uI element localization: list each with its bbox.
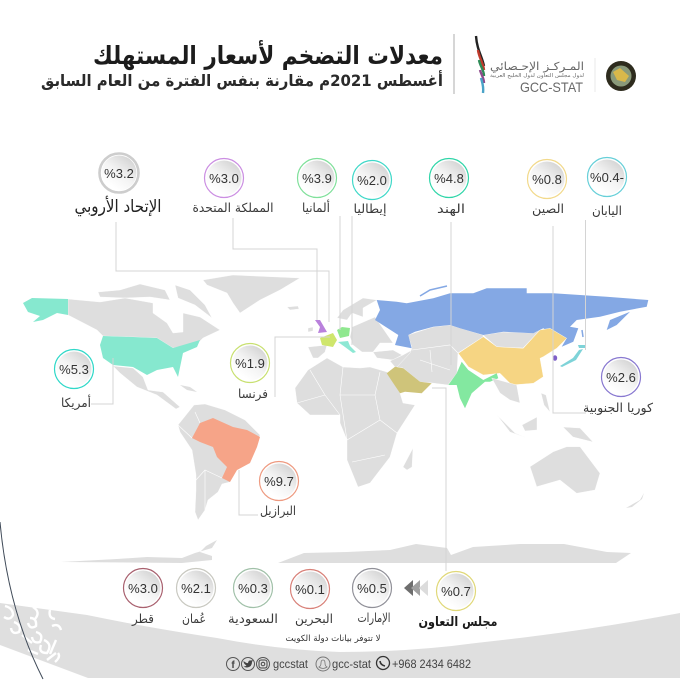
South Korea: [553, 355, 557, 361]
France: [320, 333, 337, 347]
footer contacts: [226, 656, 471, 671]
marker: Saudi Arabia: السعودية: [228, 611, 278, 627]
decorative calligraphy pattern: [4, 606, 61, 662]
marker: UAE: %0.5: [357, 581, 387, 596]
marker: USA: [54, 350, 94, 411]
South America: [178, 404, 260, 520]
Europe: [308, 298, 402, 360]
marker: Bahrain: %0.1: [295, 582, 325, 597]
New Zealand: [626, 493, 644, 508]
Southeast Asia: [492, 378, 593, 442]
marker: UAE: [352, 568, 392, 626]
marker: France: %1.9: [235, 356, 265, 371]
Antarctica: [61, 540, 631, 563]
logo: GCC-STAT: [476, 36, 585, 95]
marker: China: الصين: [532, 201, 564, 217]
Canada: [68, 298, 220, 348]
Central Asia and Middle East: [397, 325, 483, 385]
logo divider: [594, 58, 596, 92]
marker: EU: %3.2: [104, 166, 134, 181]
icon: GCC emblem: [606, 61, 636, 91]
subtitle: أغسطس 2021م مقارنة بنفس الفترة من العام السابق: [41, 70, 443, 90]
marker: Brazil: [260, 462, 298, 519]
marker: Japan: [588, 158, 626, 218]
marker: UK: [192, 158, 274, 215]
marker: UK: المملكة المتحدة: [192, 200, 274, 215]
marker: EU: [74, 154, 162, 217]
footer contacts: +968 2434 6482: [392, 657, 471, 671]
marker: Saudi Arabia: [228, 568, 278, 627]
marker: Saudi Arabia: %0.3: [238, 581, 268, 596]
marker: Oman: عُمان: [182, 611, 206, 626]
icon: snapchat: [316, 657, 330, 671]
marker: Brazil: %9.7: [264, 474, 294, 489]
marker: USA: %5.3: [59, 362, 89, 377]
Alaska: [23, 298, 68, 322]
icon: twitter: [242, 658, 254, 670]
Italy: [338, 341, 356, 353]
Brazil: [192, 418, 260, 482]
footer contacts: gcc-stat: [332, 657, 372, 671]
marker: Japan: %0.4-: [590, 170, 624, 185]
Madagascar: [403, 448, 413, 470]
Greenland and Arctic: [98, 275, 300, 318]
Russia: [375, 288, 648, 348]
marker: Qatar: %3.0: [128, 581, 158, 596]
bottom grey band: [0, 603, 680, 678]
logo: GCC-STAT: المـركـز الإحـصائي: [490, 60, 584, 73]
marker: Germany: ألمانيا: [302, 199, 330, 215]
logo: GCC-STAT: GCC-STAT: [520, 79, 583, 95]
marker: Qatar: قطر: [131, 611, 154, 627]
USA: [100, 336, 200, 377]
Mexico and Central America: [113, 366, 180, 409]
marker: Brazil: البرازيل: [260, 503, 296, 519]
Caribbean: [180, 385, 197, 392]
marker: GCC: %0.7: [441, 584, 471, 599]
marker: Oman: [176, 568, 216, 626]
Novaya Zemlya: [420, 286, 447, 296]
marker: Bahrain: البحرين: [295, 611, 333, 627]
marker: France: فرنسا: [238, 386, 268, 402]
marker: China: %0.8: [532, 172, 562, 187]
arrows: [404, 580, 428, 596]
logo: GCC-STAT: لدول مجلس التعاون لدول الخليج العربية: [490, 73, 585, 79]
marker: UK: %3.0: [209, 171, 239, 186]
marker: South Korea: [583, 358, 653, 416]
divider: [453, 34, 455, 94]
Kamchatka: [607, 312, 630, 330]
marker: South Korea: %2.6: [606, 370, 636, 385]
icon: instagram: [256, 658, 270, 670]
header title: [41, 40, 443, 90]
icon: facebook: f: [231, 660, 235, 671]
marker: Bahrain: [290, 570, 333, 627]
leader lines: [91, 216, 586, 571]
title: معدلات التضخم لأسعار المستهلك: [93, 40, 443, 71]
marker: Italy: %2.0: [357, 173, 387, 188]
marker: India: [430, 158, 468, 217]
marker: GCC: مجلس التعاون: [418, 615, 498, 630]
decorative arc: [0, 522, 43, 679]
Germany: [337, 327, 350, 338]
Africa: [295, 358, 415, 487]
marker: USA: أمريكا: [61, 394, 91, 411]
world map: [23, 275, 648, 563]
Saudi Arabia: [387, 367, 432, 393]
marker: India: %4.8: [434, 171, 464, 186]
Australia: [530, 447, 600, 493]
marker: GCC: [418, 572, 498, 630]
marker: UAE: الإمارات: [358, 610, 390, 626]
marker: EU: الإتحاد الأروبي: [74, 196, 162, 217]
Iraq and Syria: [390, 350, 415, 372]
India: [448, 362, 498, 408]
Mongolia: [483, 330, 540, 348]
marker: Qatar: [124, 568, 162, 627]
Sakhalin: [582, 330, 583, 337]
marker: Germany: [298, 158, 336, 215]
UK: [315, 320, 327, 333]
marker: China: [528, 160, 566, 217]
marker: Japan: اليابان: [592, 203, 622, 218]
Japan: [560, 345, 586, 367]
marker: Germany: %3.9: [302, 171, 332, 186]
marker: France: [230, 344, 270, 402]
note: لا تتوفر بيانات دولة الكويت: [286, 634, 380, 644]
marker: South Korea: كوريا الجنوبية: [583, 400, 653, 416]
marker: Italy: إيطاليا: [354, 201, 386, 216]
marker: Oman: %2.1: [181, 581, 211, 596]
marker: Italy: [352, 160, 392, 216]
icon: facebook: [226, 658, 240, 671]
China: [458, 328, 567, 385]
footer contacts: gccstat: [273, 657, 309, 671]
icon: whatsapp: [376, 656, 390, 670]
marker: India: الهند: [437, 201, 465, 217]
